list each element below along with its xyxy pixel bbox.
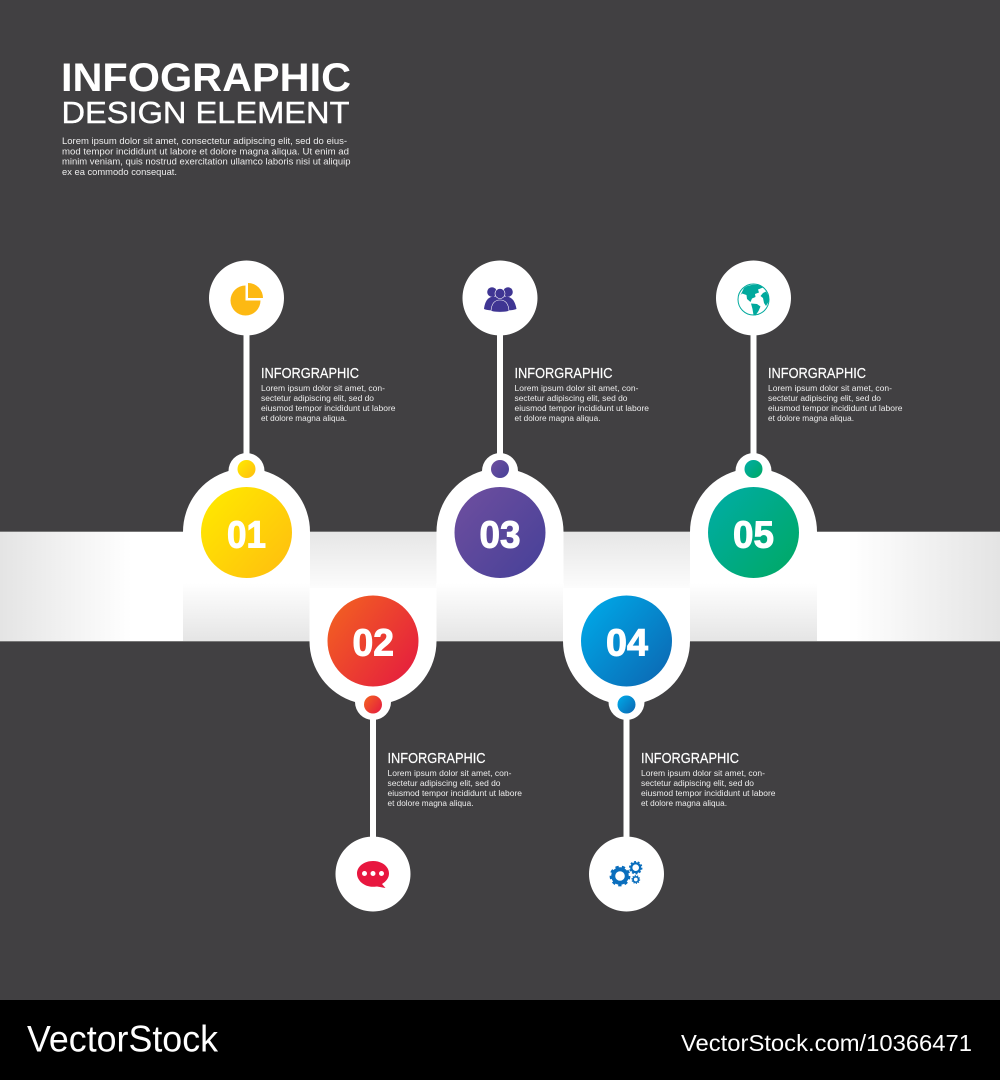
number circle [328,596,418,686]
intro text: mod tempor incididunt ut labore et dolore magna aliqua. Ut enim ad [62,146,349,156]
body: eiusmod tempor incididunt ut labore [768,403,903,413]
body: sectetur adipiscing elit, sed do [641,778,754,788]
step 01 [183,260,396,583]
body: Lorem ipsum dolor sit amet, con- [261,383,385,393]
icon: people [484,287,516,312]
icon: pie chart [230,283,263,316]
band lower shading 05 [690,583,817,641]
intro text [62,136,350,177]
band lower shading 03 [436,583,564,641]
footer background [0,1000,1000,1080]
icon: globe [738,284,769,316]
body: et dolore magna aliqua. [641,798,727,808]
knob dot [618,696,636,714]
band right segment [817,532,1000,641]
body: eiusmod tempor incididunt ut labore [514,403,649,413]
heading: INFORGRAPHIC [261,366,359,382]
body: Lorem ipsum dolor sit amet, con- [768,383,892,393]
footer logo: VectorStock [27,1018,218,1060]
body: et dolore magna aliqua. [261,413,347,423]
body: et dolore magna aliqua. [388,798,474,808]
body [261,383,396,423]
body: et dolore magna aliqua. [768,413,854,423]
body: eiusmod tempor incididunt ut labore [641,788,776,798]
knob and tab [690,453,817,583]
body: et dolore magna aliqua. [514,413,600,423]
knob and tab [183,453,310,583]
body: sectetur adipiscing elit, sed do [388,778,501,788]
knob and tab [563,588,690,720]
stem and icon disc [462,260,537,455]
body: sectetur adipiscing elit, sed do [514,393,628,403]
body: eiusmod tempor incididunt ut labore [261,403,396,413]
body [388,768,522,808]
band left segment [0,532,183,641]
knob and tab [309,588,437,720]
number: 05 [733,514,774,556]
band lower shading 01 [183,583,310,641]
knob dot [744,460,762,478]
heading: INFORGRAPHIC [768,366,866,382]
number: 03 [480,514,520,556]
footer bar [0,1000,1000,1080]
number circle [201,487,292,578]
body: Lorem ipsum dolor sit amet, con- [514,383,639,393]
title block [61,56,351,177]
body: Lorem ipsum dolor sit amet, con- [641,768,765,778]
step 05 [690,260,903,583]
number: 01 [227,514,266,556]
text block [768,366,903,423]
number circle [454,487,546,578]
stem and icon disc [589,715,664,912]
step 02 [309,588,522,912]
text block [261,366,396,423]
body: eiusmod tempor incididunt ut labore [388,788,522,798]
intro text: Lorem ipsum dolor sit amet, consectetur adipiscing elit, sed do eius- [62,136,347,146]
white band [0,531,1000,642]
knob dot [491,460,509,478]
heading: INFORGRAPHIC [514,366,612,382]
footer url: VectorStock.com/10366471 [681,1030,972,1056]
icon: gears [611,862,642,885]
heading: INFORGRAPHIC [641,751,739,767]
knob and tab [436,453,564,583]
body [641,768,776,808]
band edge top [0,531,1000,532]
heading: INFORGRAPHIC [388,751,486,767]
stem and icon disc [716,260,791,455]
step 03 [436,260,649,583]
title line 2: DESIGN ELEMENT [62,96,350,130]
knob dot [238,460,256,478]
icon: speech bubble [357,861,389,888]
band gap shading 04 [563,532,690,588]
number: 04 [606,622,648,664]
text block [514,366,649,423]
number circle [708,487,799,578]
stem and icon disc [209,260,284,455]
body: sectetur adipiscing elit, sed do [768,393,881,403]
body: Lorem ipsum dolor sit amet, con- [388,768,512,778]
intro text: minim veniam, quis nostrud exercitation ullamco laboris nisi ut aliquip [62,157,350,167]
number: 02 [352,622,394,664]
body [514,383,649,423]
text block [388,751,522,808]
body: sectetur adipiscing elit, sed do [261,393,374,403]
step 04 [563,588,776,912]
body [768,383,903,423]
knob dot [364,696,382,714]
intro text: ex ea commodo consequat. [62,167,177,177]
number circle [581,596,672,686]
band edge bottom [0,641,1000,642]
title line 1: INFOGRAPHIC [61,56,351,100]
stem and icon disc [335,715,410,912]
text block [641,751,776,808]
band gap shading 02 [310,532,437,588]
